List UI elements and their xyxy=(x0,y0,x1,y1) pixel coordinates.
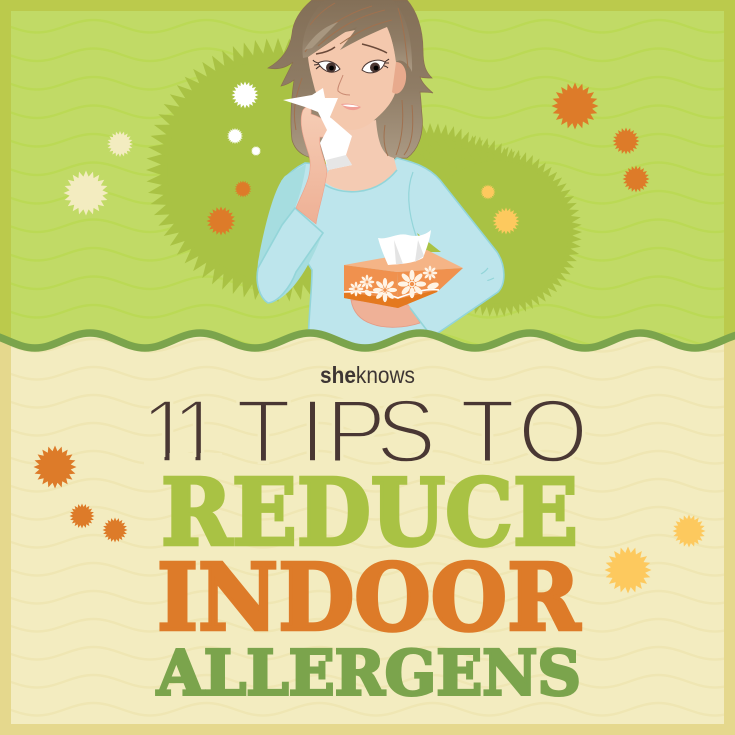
tissue in box xyxy=(378,230,431,265)
tissue shading xyxy=(326,155,352,170)
pollen bursts: upper area xyxy=(64,82,650,236)
gap between arm and body xyxy=(417,233,441,252)
left sleeve xyxy=(258,164,323,303)
left spiky bush xyxy=(126,15,432,318)
fringe strands xyxy=(294,3,413,156)
heading: REDUCE: REDUCE xyxy=(161,458,578,566)
heading: ALLERGENS: ALLERGENS xyxy=(156,636,581,710)
neck and chest skin xyxy=(322,120,397,191)
right eyebrow xyxy=(362,44,387,53)
crumpled tissue xyxy=(283,88,352,170)
panel: green background with wave lines xyxy=(0,0,735,360)
right sleeve cuff xyxy=(408,262,498,337)
left eye xyxy=(313,60,340,72)
left eyebrow xyxy=(316,47,335,54)
right eye xyxy=(362,59,389,73)
front hair xyxy=(302,0,412,72)
cuff edge xyxy=(410,292,498,337)
ear xyxy=(392,62,406,94)
wavy green divider xyxy=(0,333,735,348)
teeth xyxy=(342,105,359,107)
foot bars of the numerals masked to match the plain strokes xyxy=(144,453,222,465)
mouth xyxy=(341,104,361,110)
forearm and hand xyxy=(296,107,331,224)
back hair xyxy=(268,0,433,160)
arm creases xyxy=(460,268,494,283)
tissue box xyxy=(344,230,463,308)
heading: INDOOR: INDOOR xyxy=(157,544,581,652)
collar line xyxy=(322,170,397,192)
panel: cream lower panel with wave lines xyxy=(0,320,735,735)
nose xyxy=(338,75,350,95)
box flowers xyxy=(349,266,440,302)
right spiky bush xyxy=(324,107,596,327)
fringe highlight xyxy=(304,22,338,50)
woman with tissue and tissue box xyxy=(257,0,504,345)
heading: 11 TIPS TO: 11TIPSTO xyxy=(141,382,588,482)
shoulder crease xyxy=(409,172,416,236)
lower hand under box xyxy=(351,300,420,327)
pollen bursts: lower area xyxy=(34,446,706,594)
face xyxy=(308,24,397,130)
left cuff xyxy=(257,208,323,303)
logo: sheknows: sheknows xyxy=(320,362,415,388)
shirt body and right arm xyxy=(280,158,504,345)
